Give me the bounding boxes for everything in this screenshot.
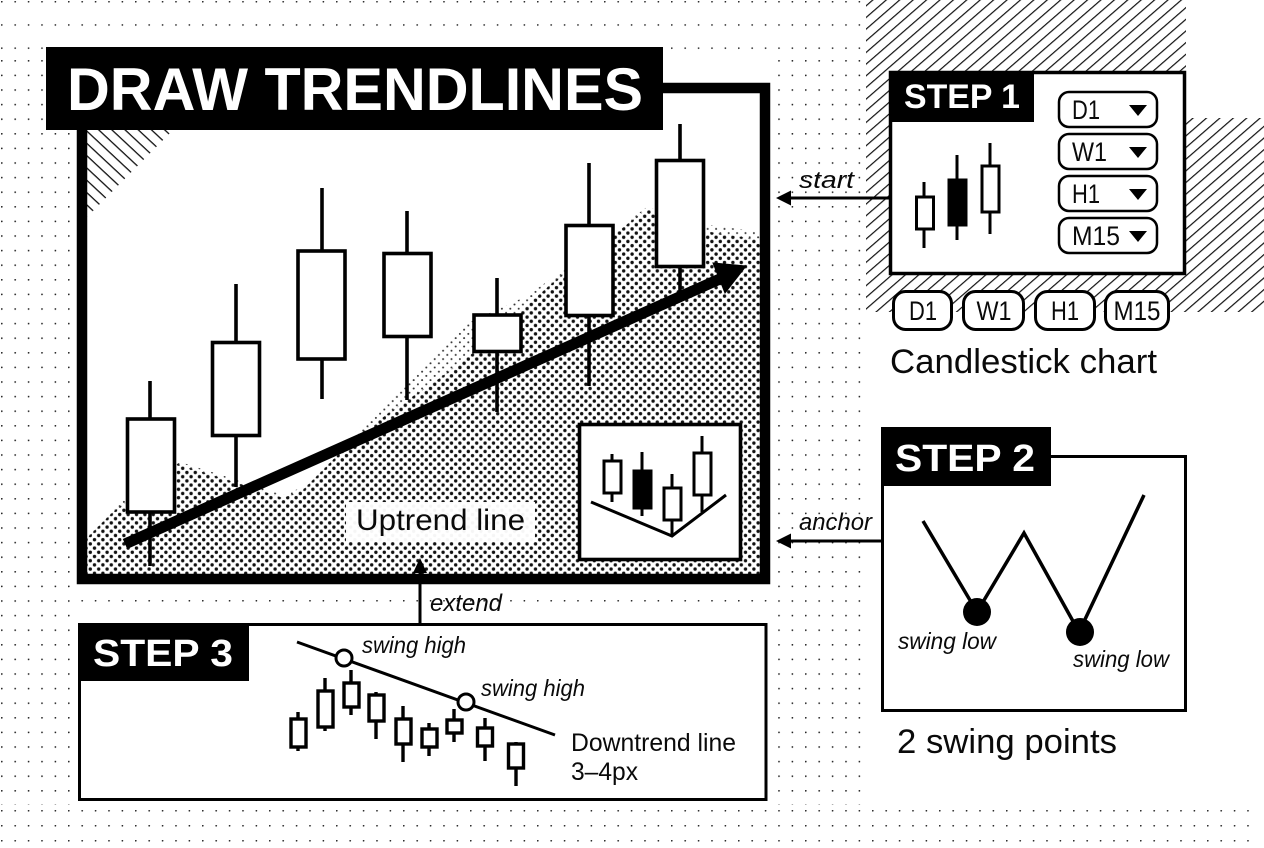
panel: step 3	[78, 623, 766, 800]
timeframe pills	[894, 292, 1168, 330]
hatched background behind step 1	[866, 0, 1264, 312]
dropdown: H1: H1	[1072, 179, 1100, 209]
swing low label: swing low	[898, 628, 997, 654]
dropdown: H1	[1059, 176, 1157, 211]
step 2 heading	[881, 427, 1051, 486]
dropdown: W1: W1	[1072, 137, 1107, 167]
dropdown: M15	[1059, 218, 1157, 253]
swing low label: swing low	[1073, 646, 1170, 672]
downtrend caption: 3–4px	[571, 758, 638, 786]
arrow: anchor	[776, 509, 881, 548]
step 3 heading	[78, 623, 249, 681]
label: uptrend line: Uptrend line	[356, 504, 525, 537]
step 1 heading: STEP 1	[904, 78, 1020, 116]
halftone area fringe	[87, 207, 760, 575]
W pattern	[923, 495, 1144, 646]
dropdown: D1	[1059, 92, 1157, 127]
step 2 heading: STEP 2	[895, 438, 1035, 480]
timeframe pills: W1	[976, 296, 1012, 326]
timeframe pills: H1	[1051, 296, 1079, 326]
step 1 heading	[889, 71, 1034, 122]
arrow: anchor: anchor	[799, 509, 873, 536]
swing high label: swing high	[362, 632, 466, 658]
dropdown: D1: D1	[1072, 95, 1100, 125]
panel: main chart	[82, 88, 765, 579]
arrow: start	[776, 167, 890, 206]
arrow: extend	[413, 558, 503, 623]
arrow: extend: extend	[430, 590, 503, 617]
halftone area	[87, 209, 760, 575]
downtrend caption	[571, 729, 736, 786]
downtrend caption: Downtrend line	[571, 729, 736, 757]
panel: step 1	[889, 71, 1184, 274]
chart background	[82, 88, 765, 579]
corner hatch	[87, 130, 173, 217]
dropdown: M15: M15	[1072, 221, 1120, 251]
inset: V-shaped candles	[580, 424, 740, 560]
frame	[82, 88, 765, 579]
panel: step 2	[881, 427, 1186, 710]
swing high label: swing high	[481, 675, 585, 701]
timeframe pills: M15	[1114, 296, 1160, 326]
timeframe pills: D1	[909, 296, 937, 326]
caption: 2 swing points: 2 swing points	[897, 723, 1117, 761]
candlesticks	[128, 124, 704, 566]
title: DRAW TRENDLINES	[67, 56, 643, 123]
dropdown: W1	[1059, 134, 1157, 169]
caption: candlestick chart: Candlestick chart	[890, 343, 1158, 381]
arrow: start: start	[799, 167, 856, 194]
step 3 heading: STEP 3	[93, 633, 233, 675]
arrow: uptrend	[125, 263, 746, 544]
small candles	[291, 670, 524, 786]
downtrend line	[297, 642, 555, 735]
candles	[916, 143, 999, 248]
